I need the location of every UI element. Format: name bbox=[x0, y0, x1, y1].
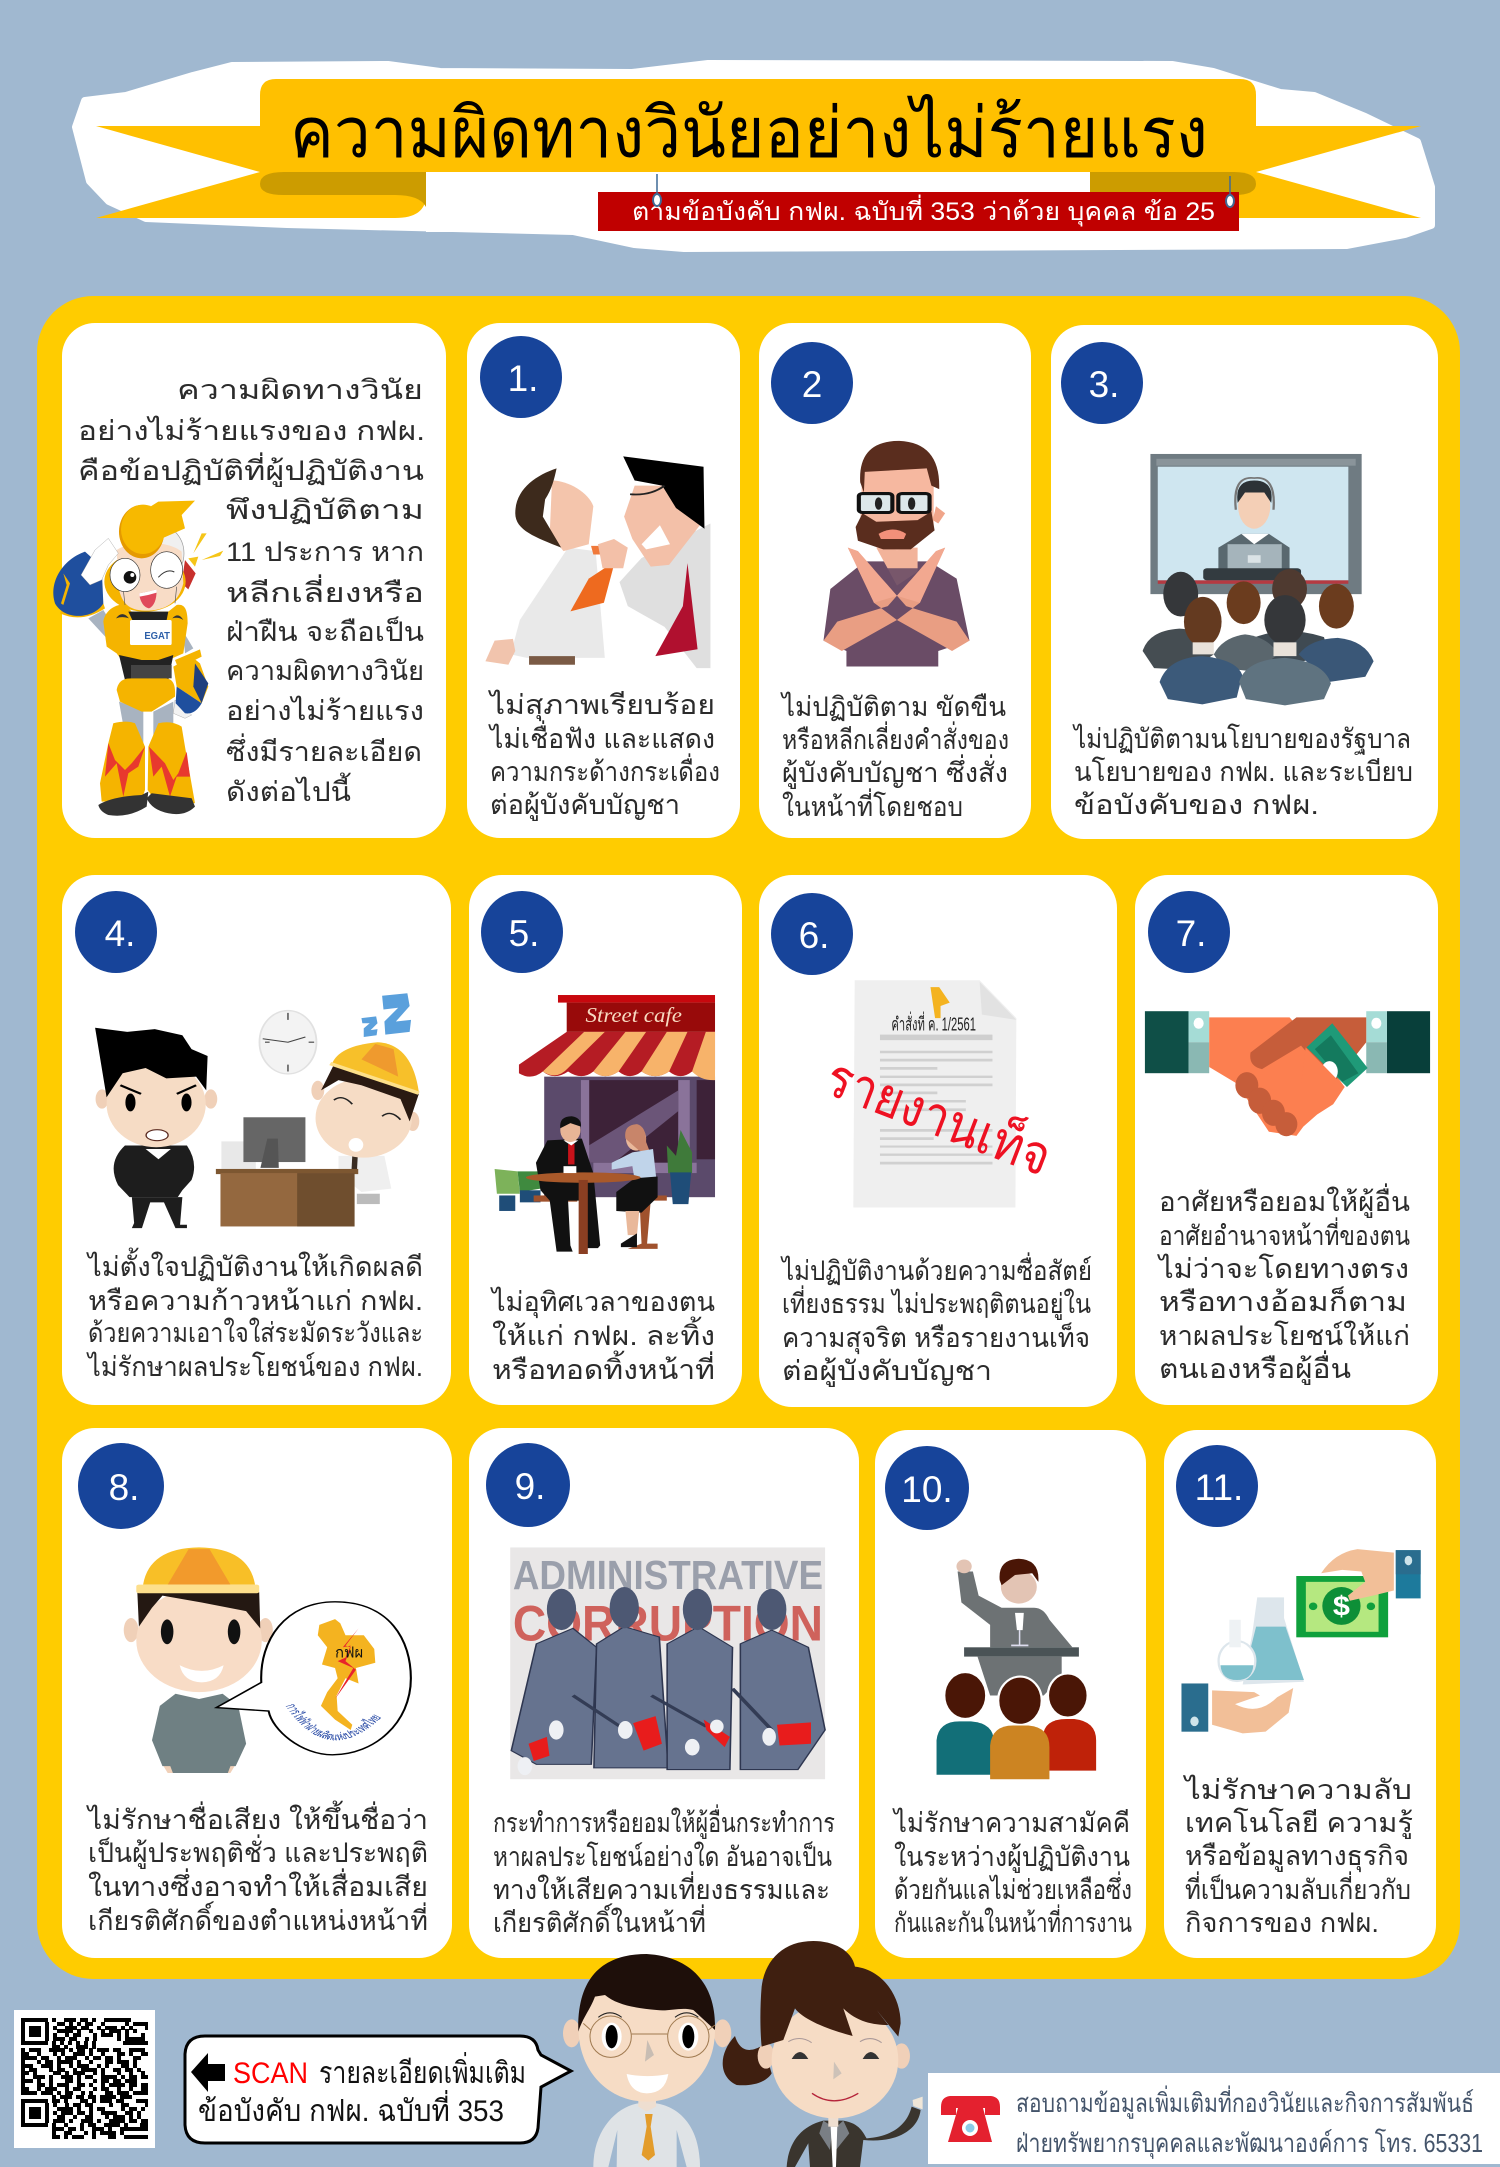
caption 7: ตนเองหรือผู้อื่น bbox=[1159, 1350, 1351, 1385]
icon: administrative corruption picture bbox=[510, 1547, 825, 1779]
caption 4: ไม่รักษาผลประโยชน์ของ กฟผ. bbox=[86, 1351, 423, 1382]
number badge 11 bbox=[1176, 1445, 1258, 1527]
caption 10: กันและกันในหน้าที่การงาน bbox=[894, 1904, 1132, 1938]
caption 7: ไม่ว่าจะโดยทางตรง bbox=[1157, 1254, 1409, 1284]
caption 5: หรือทอดทิ้งหน้าที่ bbox=[492, 1350, 715, 1385]
icon: EGAT mascot bbox=[53, 501, 223, 816]
ribbon centre bbox=[260, 79, 1256, 172]
number badge 8: 8. bbox=[109, 1467, 139, 1508]
caption 9 bbox=[493, 1804, 835, 1938]
panel: card 8 bbox=[62, 1428, 452, 1958]
number badge 11: 11. bbox=[1195, 1467, 1243, 1508]
caption 7: หาผลประโยชน์ให้แก่ bbox=[1159, 1320, 1410, 1351]
icon: worker with speech bubble: กฟผ bbox=[335, 1644, 363, 1662]
caption 10: ไม่รักษาความสามัคคี bbox=[892, 1808, 1130, 1838]
icon: worker with speech bubble bbox=[124, 1547, 412, 1773]
caption 6: ต่อผู้บังคับบัญชา bbox=[782, 1356, 992, 1387]
panel: card 3 bbox=[1051, 325, 1438, 839]
intro text: อย่างไม่ร้ายแรงของ กฟผ. bbox=[78, 416, 425, 446]
intro text: ความผิดทางวินัย bbox=[177, 375, 423, 405]
caption 4: หรือความก้าวหน้าแก่ กฟผ. bbox=[88, 1286, 423, 1316]
intro text: อย่างไม่ร้ายแรง bbox=[226, 696, 424, 726]
man bbox=[563, 1954, 731, 2167]
icon: video conference bbox=[1143, 454, 1374, 705]
icon: document bbox=[853, 980, 1016, 1208]
caption 1: ไม่เชื่อฟัง และแสดง bbox=[488, 720, 715, 754]
caption 11 bbox=[1183, 1775, 1413, 1938]
caption 3: นโยบายของ กฟผ. และระเบียบ bbox=[1074, 757, 1413, 787]
icon: EGAT mascot: EGAT bbox=[144, 631, 170, 642]
number badge 4 bbox=[75, 891, 157, 973]
icon: trade secret exchange bbox=[1181, 1549, 1421, 1733]
caption 7: อาศัยหรือยอมให้ผู้อื่น bbox=[1159, 1183, 1410, 1218]
number badge 9 bbox=[486, 1443, 570, 1527]
panel: card 7 bbox=[1135, 875, 1438, 1405]
ribbon tails bbox=[96, 126, 426, 218]
caption 7: หรือทางอ้อมก็ตาม bbox=[1159, 1284, 1407, 1317]
characters: man and woman bbox=[563, 1941, 923, 2167]
scan text: รายละเอียดเพิ่มเติม bbox=[319, 2052, 526, 2090]
caption 9: กระทำการหรือยอมให้ผู้อื่นกระทำการ bbox=[493, 1804, 835, 1839]
icon: quarrel bbox=[485, 456, 710, 668]
icon: man crossing arms bbox=[823, 441, 969, 666]
icon: street cafe: Street cafe bbox=[586, 1004, 682, 1027]
number badge 1: 1. bbox=[508, 358, 538, 399]
number badge 9: 9. bbox=[515, 1466, 545, 1507]
caption 10: ในระหว่างผู้ปฏิบัติงาน bbox=[894, 1841, 1130, 1873]
scan text: SCAN bbox=[233, 2057, 308, 2090]
icon: sleeping worker bbox=[95, 993, 419, 1228]
icon: street cafe bbox=[495, 995, 715, 1254]
caption 4: ด้วยความเอาใจใส่ระมัดระวังและ bbox=[88, 1317, 423, 1348]
caption 4 bbox=[86, 1247, 423, 1382]
woman bbox=[723, 1941, 923, 2167]
caption 1: ไม่สุภาพเรียบร้อย bbox=[488, 690, 715, 722]
caption 7: อาศัยอำนาจหน้าที่ของตน bbox=[1159, 1217, 1410, 1251]
white brush background bbox=[76, 64, 1431, 248]
intro text: หลีกเลี่ยงหรือ bbox=[226, 574, 424, 608]
caption 8: ในทางซึ่งอาจทำให้เสื่อมเสีย bbox=[88, 1868, 428, 1902]
panel: card 11 bbox=[1164, 1430, 1436, 1958]
scan text bbox=[198, 2052, 526, 2128]
caption 11: ไม่รักษาความลับ bbox=[1183, 1775, 1412, 1805]
caption 9: ทางให้เสียความเที่ยงธรรมและ bbox=[493, 1871, 830, 1905]
caption 8: เกียรติศักดิ์ของตำแหน่งหน้าที่ bbox=[88, 1901, 428, 1936]
intro text: พึงปฏิบัติตาม bbox=[226, 495, 424, 525]
caption 11: ที่เป็นความลับเกี่ยวกับ bbox=[1185, 1871, 1411, 1905]
intro text: ฝ่าฝืน จะถือเป็น bbox=[226, 614, 424, 647]
number badge 5: 5. bbox=[509, 913, 539, 954]
number badge 4: 4. bbox=[105, 913, 135, 954]
stamp: fake report: รายงานเท็จ bbox=[818, 1045, 1060, 1188]
subtitle bar bbox=[598, 192, 1239, 231]
icon: administrative corruption picture: CORRUPTION bbox=[513, 1595, 823, 1651]
icon: administrative corruption picture: ADMINISTRATIVE bbox=[513, 1553, 823, 1598]
number badge 2: 2 bbox=[802, 364, 822, 405]
number badge 2 bbox=[771, 342, 853, 424]
caption 3: ข้อบังคับของ กฟผ. bbox=[1074, 790, 1319, 820]
caption 2: ผู้บังคับบัญชา ซึ่งสั่ง bbox=[782, 754, 1008, 789]
caption 11: เทคโนโลยี ความรู้ bbox=[1185, 1808, 1413, 1839]
caption 10: ด้วยกันแลไม่ช่วยเหลือซึ่ง bbox=[894, 1871, 1132, 1905]
number badge 5 bbox=[481, 891, 563, 973]
scan text: ข้อบังคับ กฟผ. ฉบับที่ 353 bbox=[198, 2090, 504, 2128]
speech bubble: scan bbox=[185, 2036, 571, 2143]
caption 5: ไม่อุทิศเวลาของตน bbox=[490, 1287, 715, 1319]
icon: worker with speech bubble: การไฟฟ้าฝ่ายผลิตแห่งประเทศไทย bbox=[286, 1704, 381, 1740]
panel: card 6 bbox=[759, 875, 1117, 1407]
caption 11: กิจการของ กฟผ. bbox=[1185, 1908, 1379, 1938]
caption 2: หรือหลีกเลี่ยงคำสั่งของ bbox=[782, 721, 1009, 755]
number badge 3: 3. bbox=[1089, 364, 1119, 405]
panel: card 10 bbox=[875, 1430, 1146, 1958]
caption 1: ต่อผู้บังคับบัญชา bbox=[490, 790, 680, 821]
panel: card 4 bbox=[62, 875, 451, 1405]
caption 6: ไม่ปฏิบัติงานด้วยความซื่อสัตย์ bbox=[780, 1252, 1092, 1286]
panel: card 2 bbox=[759, 323, 1031, 838]
caption 9: หาผลประโยชน์อย่างใด อันอาจเป็น bbox=[493, 1839, 832, 1872]
yellow main panel bbox=[37, 296, 1460, 1979]
number badge 10 bbox=[885, 1446, 969, 1530]
intro text: 11 ประการ หาก bbox=[226, 537, 424, 567]
pins bbox=[653, 174, 1234, 207]
intro text: ซึ่งมีรายละเอียด bbox=[226, 733, 422, 767]
panel: intro card bbox=[53, 323, 446, 838]
caption 5: ให้แก่ กฟผ. ละทิ้ง bbox=[492, 1316, 715, 1351]
caption 6: ความสุจริต หรือรายงานเท็จ bbox=[782, 1320, 1090, 1355]
caption 6 bbox=[780, 1252, 1092, 1387]
contact text bbox=[1016, 2085, 1483, 2159]
number badge 6: 6. bbox=[799, 915, 829, 956]
caption 6: เที่ยงธรรม ไม่ประพฤติตนอยู่ใน bbox=[782, 1285, 1091, 1320]
caption 3 bbox=[1072, 724, 1413, 820]
intro text: ความผิดทางวินัย bbox=[226, 656, 424, 686]
title: ความผิดทางวินัยอย่างไม่ร้ายแรง bbox=[290, 94, 1208, 172]
panel: card 5 bbox=[469, 875, 742, 1405]
caption 2: ไม่ปฏิบัติตาม ขัดขืน bbox=[780, 692, 1006, 722]
icon: handshake bribe bbox=[1145, 1011, 1430, 1136]
panel: card 1 bbox=[467, 323, 740, 838]
intro text bbox=[78, 375, 425, 807]
caption 11: หรือข้อมูลทางธุรกิจ bbox=[1185, 1841, 1409, 1873]
white gap under ribbon bbox=[426, 172, 598, 232]
caption 10 bbox=[892, 1808, 1132, 1938]
caption 8 bbox=[86, 1800, 428, 1936]
number badge 1 bbox=[480, 336, 562, 418]
caption 9: เกียรติศักดิ์ในหน้าที่ bbox=[493, 1903, 706, 1938]
caption 7 bbox=[1157, 1183, 1410, 1385]
intro text: คือข้อปฏิบัติที่ผู้ปฏิบัติงาน bbox=[78, 452, 424, 487]
number badge 7 bbox=[1148, 891, 1230, 973]
caption 2: ในหน้าที่โดยชอบ bbox=[782, 788, 963, 822]
icon: document: คำสั่งที่ ค. 1/2561 bbox=[891, 1011, 976, 1035]
caption 2 bbox=[780, 692, 1009, 822]
caption 8: ไม่รักษาชื่อเสียง ให้ขึ้นชื่อว่า bbox=[86, 1800, 428, 1835]
panel: card 9 bbox=[469, 1428, 859, 1958]
QR code bbox=[14, 2010, 155, 2148]
caption 3: ไม่ปฏิบัติตามนโยบายของรัฐบาล bbox=[1072, 724, 1411, 755]
caption 5 bbox=[490, 1287, 715, 1385]
subtitle bar: ตามข้อบังคับ กฟผ. ฉบับที่ 353 ว่าด้วย บุคคล ข้อ 25 bbox=[632, 194, 1215, 227]
icon: arrow bbox=[191, 2053, 225, 2092]
icon: speaker and audience bbox=[937, 1559, 1096, 1779]
icon: telephone bbox=[941, 2096, 1000, 2142]
number badge 6 bbox=[771, 893, 853, 975]
number badge 7: 7. bbox=[1176, 913, 1206, 954]
icon: trade secret exchange: $ bbox=[1333, 1592, 1350, 1622]
caption 1 bbox=[488, 690, 720, 821]
ribbon folds bbox=[260, 172, 426, 207]
caption 1: ความกระด้างกระเดื่อง bbox=[490, 753, 720, 787]
caption 4: ไม่ตั้งใจปฏิบัติงานให้เกิดผลดี bbox=[86, 1247, 423, 1282]
number badge 8 bbox=[78, 1443, 164, 1529]
intro text: ดังต่อไปนี้ bbox=[226, 772, 351, 807]
caption 8: เป็นผู้ประพฤติชั่ว และประพฤติ bbox=[88, 1834, 428, 1869]
header banner bbox=[76, 64, 1431, 248]
number badge 3 bbox=[1061, 342, 1143, 424]
number badge 10: 10. bbox=[901, 1469, 953, 1510]
contact panel bbox=[928, 2073, 1500, 2164]
